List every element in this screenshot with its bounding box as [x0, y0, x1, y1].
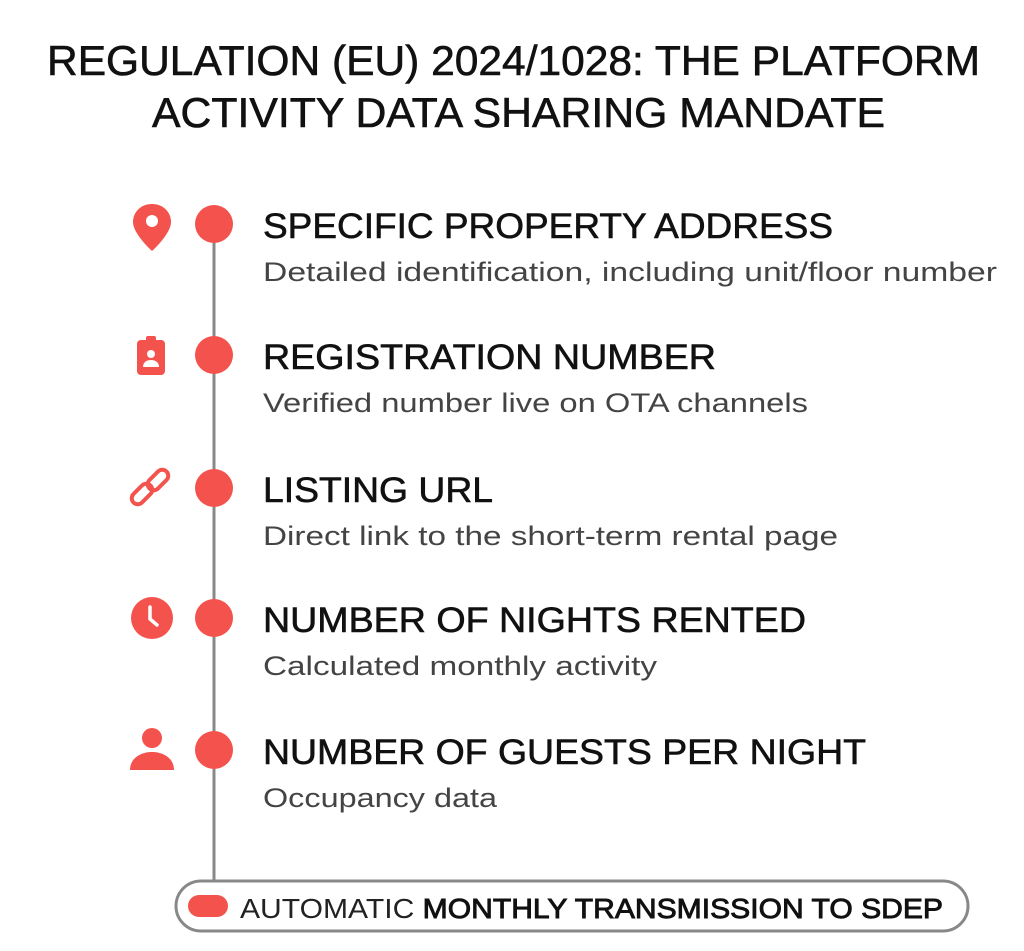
- timeline line: [212, 225, 216, 882]
- item: address: Detailed identification, including unit/floor number: [263, 257, 997, 287]
- item: address: [133, 204, 997, 287]
- title: ACTIVITY DATA SHARING MANDATE: [152, 89, 885, 136]
- item: nights: Calculated monthly activity: [263, 651, 658, 681]
- item: registration: REGISTRATION NUMBER: [263, 338, 716, 377]
- item: registration: [137, 336, 808, 418]
- title: [47, 37, 980, 136]
- callout: transmission pill: AUTOMATIC MONTHLY TRANSMISSION TO SDEP: [240, 893, 943, 924]
- title: REGULATION (EU) 2024/1028: THE PLATFORM: [47, 37, 980, 84]
- item: registration: Verified number live on OTA channels: [263, 388, 808, 418]
- item: nights: [131, 597, 806, 681]
- icon: badge: [137, 336, 165, 375]
- item: nights: NUMBER OF NIGHTS RENTED: [263, 601, 806, 640]
- icon: map pin: [133, 204, 171, 251]
- icon: clock: [131, 597, 173, 639]
- item: guests: [130, 728, 866, 813]
- item: url: LISTING URL: [263, 471, 493, 510]
- icon: link: [129, 467, 171, 507]
- callout: transmission pill: [176, 881, 968, 931]
- icon: person: [130, 728, 174, 770]
- item: url: Direct link to the short-term rental page: [263, 521, 838, 551]
- item: url: [129, 467, 838, 551]
- item: guests: NUMBER OF GUESTS PER NIGHT: [263, 733, 866, 772]
- item: address: SPECIFIC PROPERTY ADDRESS: [263, 207, 833, 246]
- item: guests: Occupancy data: [263, 783, 498, 813]
